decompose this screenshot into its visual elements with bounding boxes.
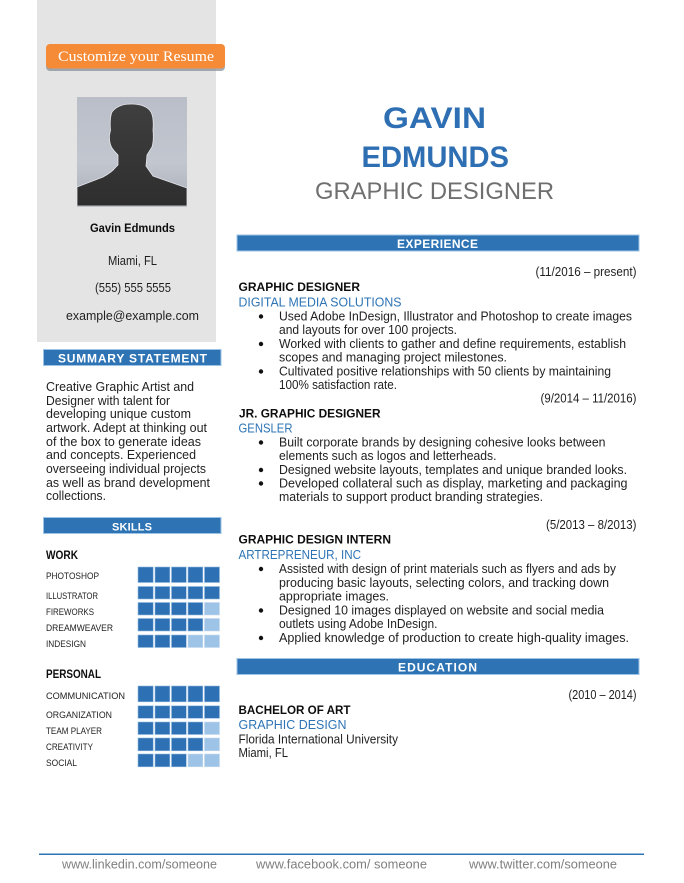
skill: creativity: CREATIVITY: [46, 742, 94, 753]
education entry: GRAPHIC DESIGN: [238, 718, 346, 732]
footer: social links: [39, 854, 644, 872]
job: graphic designer: scopes and managing project milestones.: [279, 350, 507, 364]
heading: experience: [237, 235, 639, 251]
text block: summary: overseeing individual projects: [46, 462, 206, 476]
heading: education: EDUCATION: [398, 660, 477, 674]
text block: summary: collections.: [46, 489, 106, 503]
skill: illustrator: ILLUSTRATOR: [46, 591, 98, 602]
job: jr graphic designer: Built corporate brands by designing cohesive looks between: [279, 436, 606, 450]
job: graphic designer: [238, 265, 636, 392]
skill: communication: [46, 686, 220, 702]
contact location: Miami, FL: [108, 254, 157, 268]
text block: summary: of the box to generate ideas: [46, 435, 201, 449]
job: jr graphic designer: [238, 392, 636, 504]
skill: dreamweaver: [46, 618, 220, 634]
job: graphic designer: (11/2016 – present): [536, 265, 636, 279]
skill: dreamweaver: DREAMWEAVER: [46, 623, 113, 634]
customize button: Customize your Resume: [58, 49, 214, 65]
skill: communication: COMMUNICATION: [46, 691, 125, 702]
job: jr graphic designer: JR. GRAPHIC DESIGNER: [239, 406, 381, 420]
job: graphic design intern: (5/2013 – 8/2013): [546, 518, 636, 532]
skill: social: [46, 754, 220, 769]
skill: fireworks: FIREWORKS: [46, 607, 94, 618]
text block: summary: as well as brand development: [46, 476, 211, 490]
heading: skills: [44, 518, 221, 534]
job: graphic designer: Cultivated positive relationships with 50 clients by maintaining: [279, 364, 611, 378]
title: name and role: [315, 102, 554, 205]
skill: creativity: [46, 738, 220, 753]
panel: contact sidebar: [37, 0, 216, 342]
job: graphic design intern: Assisted with design of print materials such as flyers and ads by: [279, 562, 617, 576]
contact email: example@example.com: [66, 309, 199, 323]
text block: summary: and concepts. Experienced: [46, 448, 196, 462]
contact name: Gavin Edmunds: [90, 221, 175, 235]
education entry: Florida International University: [238, 732, 399, 746]
job: graphic designer: Used Adobe InDesign, Illustrator and Photoshop to create images: [279, 310, 632, 324]
job: graphic design intern: appropriate images.: [279, 590, 389, 604]
skill: fireworks: [46, 602, 220, 618]
job: graphic designer: 100% satisfaction rate.: [279, 378, 397, 392]
footer: social links: www.linkedin.com/someone: [61, 858, 217, 872]
panel: personal skills: [46, 669, 220, 769]
text block: summary: Designer with talent for: [46, 394, 170, 408]
skill: organization: ORGANIZATION: [46, 710, 112, 721]
text block: summary: developing unique custom: [46, 407, 191, 421]
job: graphic design intern: Designed 10 images displayed on website and social media: [279, 604, 604, 618]
job: jr graphic designer: Developed collateral such as display, marketing and packaging: [279, 476, 628, 490]
skill: indesign: [46, 635, 220, 650]
job: jr graphic designer: (9/2014 – 11/2016): [540, 392, 636, 406]
job: graphic design intern: ARTREPRENEUR, INC: [238, 548, 361, 562]
skill: photoshop: [46, 567, 220, 582]
education entry: Miami, FL: [238, 746, 288, 760]
job: graphic design intern: [238, 518, 636, 645]
heading: experience: EXPERIENCE: [397, 237, 478, 251]
skill: social: SOCIAL: [46, 758, 77, 769]
footer: social links: www.twitter.com/someone: [468, 858, 617, 872]
job: graphic designer: DIGITAL MEDIA SOLUTIONS: [238, 296, 402, 310]
job: graphic designer: GRAPHIC DESIGNER: [238, 280, 360, 294]
footer: social links: www.facebook.com/ someone: [255, 858, 427, 872]
text block: summary: Creative Graphic Artist and: [46, 380, 194, 394]
heading: summary statement: SUMMARY STATEMENT: [58, 352, 208, 366]
job: jr graphic designer: elements such as logos and letterheads.: [279, 449, 496, 463]
portrait photo placeholder: [77, 97, 187, 207]
skill: photoshop: PHOTOSHOP: [46, 571, 99, 582]
skill: organization: [46, 706, 220, 721]
heading: education: [237, 658, 639, 674]
job: graphic design intern: GRAPHIC DESIGN INTERN: [238, 532, 391, 546]
skill: team player: TEAM PLAYER: [46, 726, 102, 737]
title: name and role: GRAPHIC DESIGNER: [315, 178, 554, 205]
customize button: [46, 44, 225, 71]
job: jr graphic designer: Designed website layouts, templates and unique branded looks.: [279, 463, 627, 477]
job: graphic designer: Worked with clients to gather and define requirements, establish: [279, 337, 626, 351]
job: graphic design intern: Applied knowledge of production to create high-quality images.: [279, 631, 629, 645]
title: name and role: EDMUNDS: [362, 141, 509, 174]
text block: summary: [46, 380, 211, 503]
job: jr graphic designer: materials to support product branding strategies.: [279, 490, 543, 504]
panel: work skills: [46, 550, 220, 650]
heading: skills: SKILLS: [112, 522, 152, 534]
text block: summary: artwork. Adept at thinking out: [46, 421, 208, 435]
contact phone: (555) 555 5555: [95, 281, 171, 295]
title: name and role: GAVIN: [383, 102, 486, 135]
skill: team player: [46, 722, 220, 737]
skill: illustrator: [46, 586, 220, 602]
skill: indesign: INDESIGN: [46, 639, 86, 650]
job: jr graphic designer: GENSLER: [238, 422, 292, 436]
education entry: (2010 – 2014): [568, 688, 636, 702]
subheading: personal: PERSONAL: [46, 669, 101, 681]
job: graphic design intern: producing basic layouts, selecting colors, and tracking down: [279, 576, 609, 590]
subheading: work: WORK: [46, 550, 79, 562]
job: graphic designer: and layouts for over 100 projects.: [279, 323, 457, 337]
education entry: BACHELOR OF ART: [238, 703, 351, 717]
job: graphic design intern: outlets using Adobe InDesign.: [279, 617, 438, 631]
education entry: [238, 688, 636, 760]
